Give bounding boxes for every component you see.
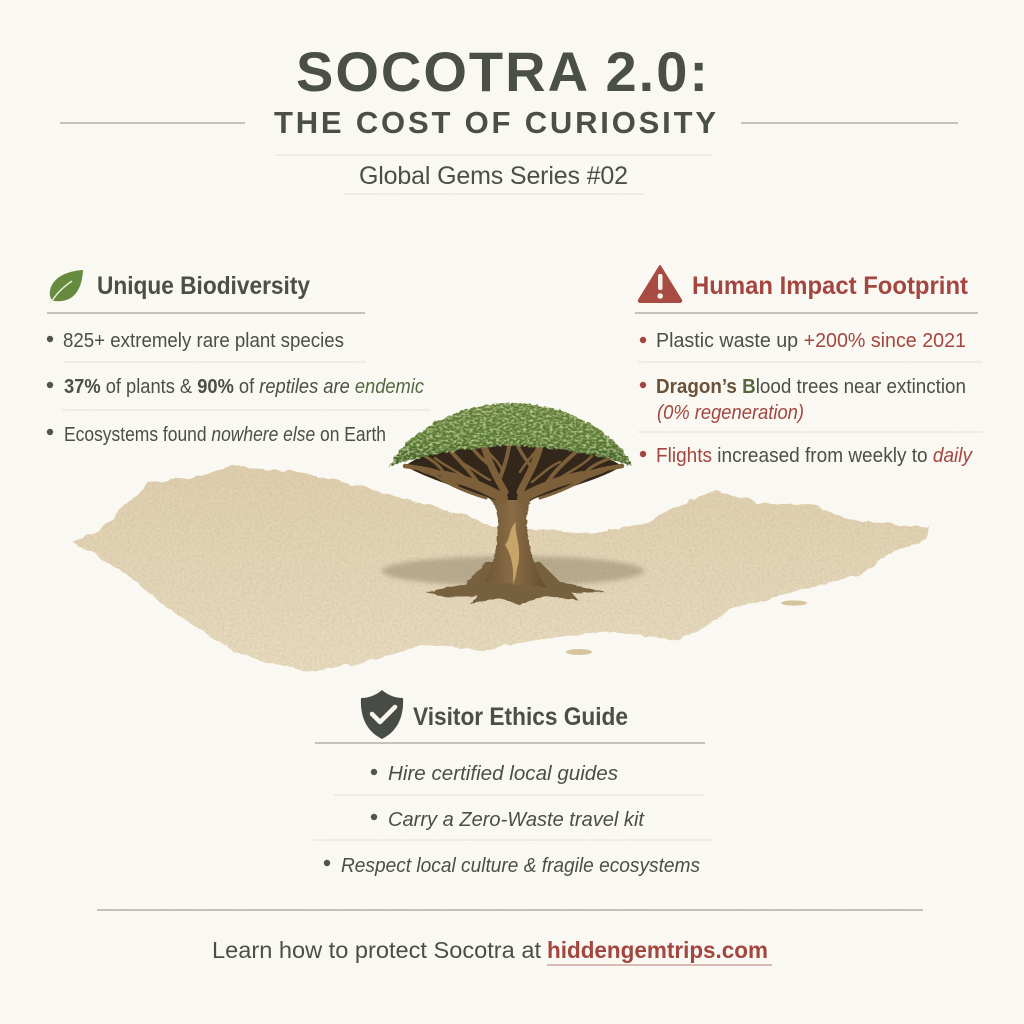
dark under-canopy [405, 438, 622, 500]
heading: Human Impact Footprint [692, 272, 969, 300]
icon: leaf [50, 270, 83, 304]
canopy [390, 403, 632, 466]
panel: unique biodiversity [47, 270, 430, 446]
illustration: island map [72, 465, 930, 672]
heading: Visitor Ethics Guide [413, 703, 628, 731]
series label: Global Gems Series #02 [359, 162, 628, 190]
list item: 37% of plants & 90% of reptiles are endemic [64, 376, 424, 398]
panel: human impact footprint [635, 266, 982, 467]
main title: SOCOTRA 2.0: [296, 40, 708, 103]
panel: visitor ethics guide [314, 690, 713, 877]
title block [60, 40, 958, 194]
heading: Unique Biodiversity [97, 272, 310, 300]
website link: hiddengemtrips.com [547, 937, 768, 963]
list item: Respect local culture & fragile ecosystems [341, 855, 700, 877]
icon: warning triangle [639, 266, 681, 302]
subtitle: THE COST OF CURIOSITY [274, 105, 716, 140]
icon: shield check [361, 690, 403, 739]
list item: Hire certified local guides [388, 763, 618, 785]
illustration: dragon's blood tree [382, 403, 644, 605]
list item: Flights increased from weekly to daily [656, 445, 973, 467]
list item: Carry a Zero-Waste travel kit [388, 809, 645, 831]
trunk scar [505, 522, 519, 584]
islet [566, 649, 592, 655]
list item: Dragon’s Blood trees near extinction [656, 376, 966, 398]
list item: (0% regeneration) [657, 402, 804, 424]
footer call to action [212, 937, 772, 965]
list item: Ecosystems found nowhere else on Earth [64, 424, 386, 446]
islet [781, 600, 807, 606]
trunk [470, 470, 555, 587]
list item: 825+ extremely rare plant species [63, 330, 344, 352]
island silhouette [72, 465, 930, 672]
list item: Plastic waste up +200% since 2021 [656, 330, 966, 352]
branches [405, 440, 622, 498]
ground shadow [382, 556, 644, 586]
list item [640, 376, 966, 424]
footer call to action: Learn how to protect Socotra at [212, 937, 542, 963]
roots [425, 562, 605, 605]
